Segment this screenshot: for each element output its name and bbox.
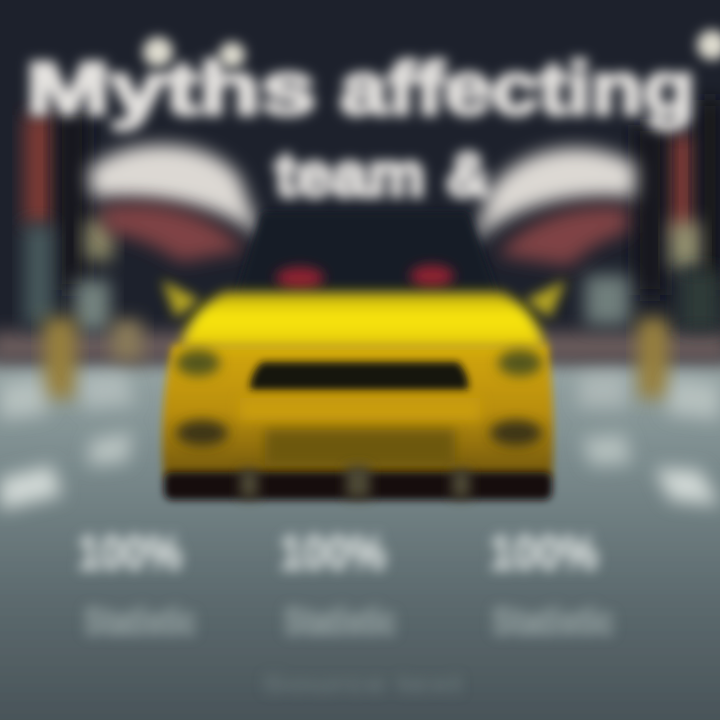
car fog lights bbox=[176, 420, 542, 446]
car underside bbox=[164, 472, 552, 500]
title: Myths bbox=[26, 47, 316, 130]
stat: column two bbox=[280, 527, 396, 643]
title: affecting bbox=[340, 47, 695, 130]
stat value two: 100% bbox=[280, 527, 386, 580]
car tail lights bbox=[276, 265, 454, 289]
car windshield bbox=[236, 212, 498, 296]
footer text: Source text bbox=[262, 671, 462, 698]
title: team bbox=[275, 141, 425, 210]
right crowd and pillars bbox=[585, 100, 720, 398]
car mirrors bbox=[162, 280, 566, 318]
background: road floor bbox=[0, 332, 720, 720]
road markings bbox=[0, 372, 720, 510]
stat caption two: Statistic bbox=[284, 601, 396, 643]
stat caption three: Statistic bbox=[492, 601, 614, 643]
car hood bbox=[180, 292, 546, 350]
car lower grille bbox=[265, 430, 455, 466]
title bbox=[26, 47, 695, 210]
decorative light spots bbox=[143, 30, 720, 68]
stat value one: 100% bbox=[78, 527, 182, 580]
left crowd and pillars bbox=[24, 110, 142, 398]
car: yellow sports car bbox=[162, 212, 566, 500]
stat caption one: Statistic bbox=[84, 601, 196, 643]
car lower body bbox=[162, 345, 553, 478]
car bumper band bbox=[240, 398, 480, 420]
car headlights bbox=[176, 350, 542, 376]
left wing graphic bbox=[88, 145, 262, 262]
right wing graphic bbox=[472, 148, 636, 266]
stat: column three bbox=[490, 527, 614, 643]
stat value three: 100% bbox=[490, 527, 598, 580]
stat: column one bbox=[78, 527, 196, 643]
title: & bbox=[446, 141, 491, 210]
car upper grille bbox=[250, 362, 468, 390]
